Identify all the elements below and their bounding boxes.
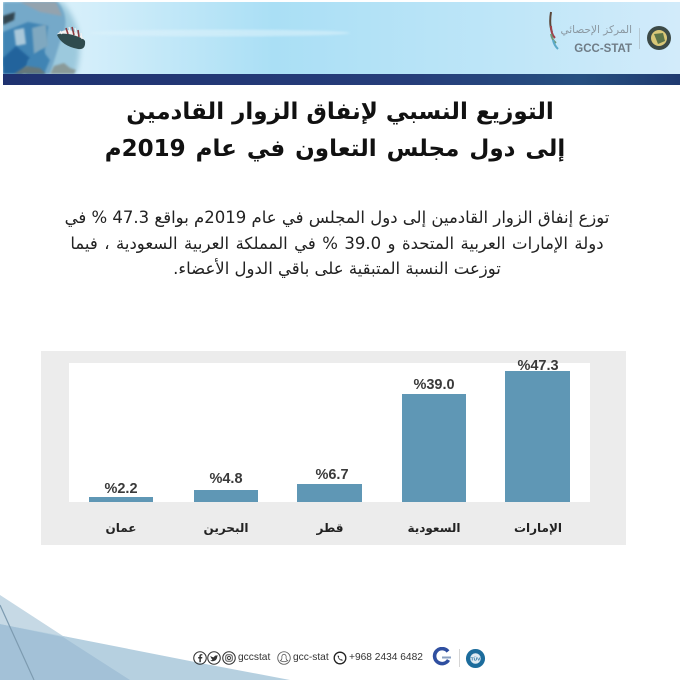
bar: UAE (505, 371, 570, 502)
navy band (3, 74, 680, 85)
handle: gcc-stat: gcc-stat (293, 652, 329, 663)
icon: instagram (222, 651, 236, 665)
icon: whatsapp (334, 652, 346, 664)
handle: gccstat: gccstat (238, 652, 270, 663)
description text (65, 208, 609, 278)
value: Saudi: %39.0 (413, 377, 455, 393)
label: Qatar: قطر (316, 521, 344, 535)
bar: Saudi (402, 394, 466, 502)
bar: Bahrain (194, 490, 258, 502)
logo text: GCC-STAT (574, 43, 632, 55)
icon: ribbon mark (549, 12, 559, 50)
icon: TUV badge: TÜV (471, 655, 481, 662)
description text: توزعت النسبة المتبقية على باقي الدول الأعضاء. (173, 259, 501, 278)
description text: دولة الإمارات العربية المتحدة و 39.0 % في المملكة العربية السعودية ، فيما (70, 234, 604, 252)
icon: parachute (57, 27, 85, 49)
value: Qatar: %6.7 (315, 467, 349, 483)
label: Saudi: السعودية (407, 521, 461, 535)
value: Oman: %2.2 (104, 481, 138, 497)
footer divider (459, 649, 460, 667)
icon: GCC emblem (647, 26, 671, 50)
title: التوزيع النسبي لإنفاق الزوار القادمين (126, 99, 554, 125)
bottom-left decorative wave (0, 595, 290, 680)
label: Oman: عمان (106, 521, 136, 535)
label: UAE: الإمارات (514, 521, 562, 535)
icon: globe collage (3, 2, 80, 74)
value: UAE: %47.3 (517, 358, 559, 374)
header banner (3, 2, 680, 85)
icon: facebook (193, 651, 207, 665)
phone number: +968 2434 6482 (349, 652, 423, 663)
logo: GCC-STAT (549, 12, 671, 55)
icon: snapchat (277, 651, 291, 665)
panel: bar chart (41, 351, 626, 545)
icon: G quality logo (432, 647, 451, 666)
logo divider (639, 28, 640, 49)
icon: TUV badge (466, 649, 485, 668)
value: Bahrain: %4.8 (209, 471, 243, 487)
icon: twitter (207, 651, 221, 665)
logo text: المركز الإحصائي (560, 24, 632, 36)
description text: توزع إنفاق الزوار القادمين إلى دول المجلس في عام 2019م بواقع 47.3 % في (65, 208, 609, 227)
title (105, 99, 565, 162)
bar: Oman (89, 497, 153, 502)
footer contact bar (193, 651, 423, 665)
logo text (560, 24, 632, 55)
bar: Qatar (297, 484, 362, 502)
title: إلى دول مجلس التعاون في عام 2019م (105, 136, 565, 162)
label: Bahrain: البحرين (204, 521, 248, 535)
plot area (69, 363, 590, 502)
